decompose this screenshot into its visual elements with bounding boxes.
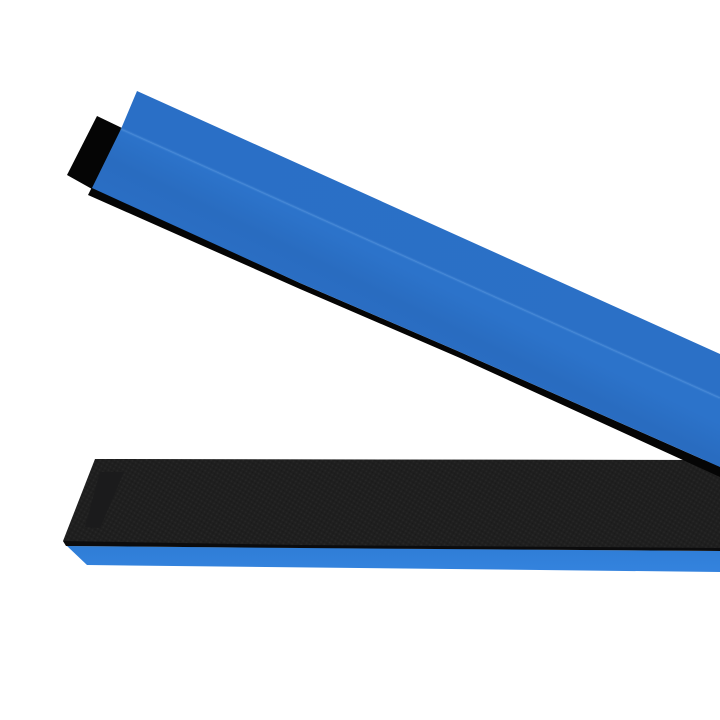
- upper mat: blue top face: [121, 91, 720, 398]
- lower mat: blue side edge: [67, 546, 720, 572]
- lower mat: black textured top surface: [63, 459, 720, 549]
- lower mat section: [63, 459, 720, 572]
- upper mat: black protruding tab: [67, 116, 122, 189]
- lower mat: dark front lip: [63, 541, 720, 551]
- lower mat: hook strip patch: [85, 472, 124, 528]
- upper mat: black underside strip: [88, 187, 720, 477]
- upper mat section: [67, 91, 720, 477]
- upper mat: crease highlight: [121, 129, 720, 398]
- upper mat: blue main face: [92, 129, 720, 467]
